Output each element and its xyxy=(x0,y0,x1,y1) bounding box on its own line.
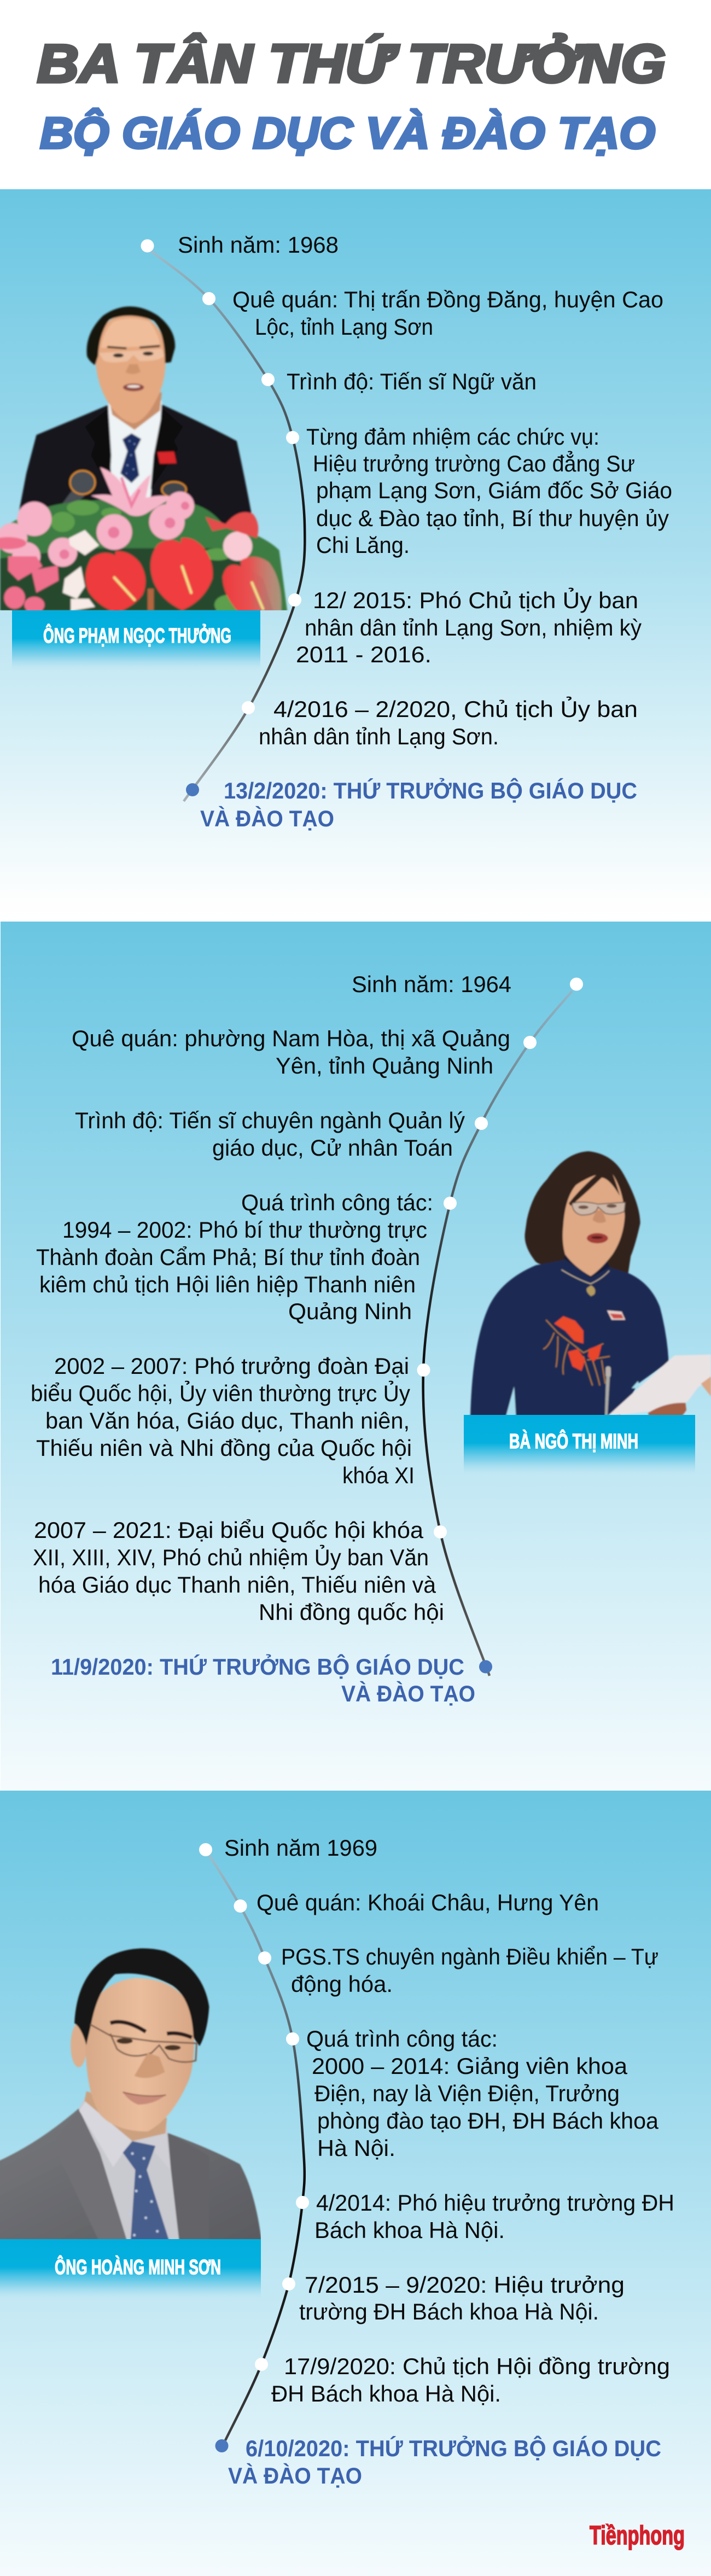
timeline text 1: phạm Lạng Sơn, Giám đốc Sở Giáo xyxy=(316,477,672,503)
timeline text 2: kiêm chủ tịch Hội liên hiệp Thanh niên xyxy=(39,1272,416,1297)
name label: Ông Phạm Ngọc Thưởng: ÔNG PHẠM NGỌC THƯỞNG xyxy=(43,623,231,648)
name label: Bà Ngô Thị Minh: BÀ NGÔ THỊ MINH xyxy=(509,1429,638,1453)
name label: Ông Hoàng Minh Sơn xyxy=(0,2239,261,2301)
timeline text 3: 7/2015 – 9/2020: Hiệu trưởng xyxy=(305,2272,625,2298)
timeline text 2: Sinh năm: 1964 xyxy=(352,971,511,997)
timeline text 1: Chi Lăng. xyxy=(316,532,410,558)
timeline text 2: 1994 – 2002: Phó bí thư thường trực xyxy=(62,1217,427,1243)
highlight: 13/2/2020 xyxy=(200,777,637,831)
timeline text 1: dục & Đào tạo tỉnh, Bí thư huyện ủy xyxy=(316,505,669,531)
timeline text 2 xyxy=(31,971,511,1625)
highlight: 6/10/2020: VÀ ĐÀO TẠO xyxy=(228,2463,362,2488)
timeline text 3: trường ĐH Bách khoa Hà Nội. xyxy=(299,2299,599,2324)
timeline text 2: Quá trình công tác: xyxy=(241,1190,433,1215)
panel: Ngô Thị Minh xyxy=(1,922,711,1791)
highlight: 13/2/2020: 13/2/2020: THỨ TRƯỞNG BỘ GIÁO DỤC xyxy=(224,777,637,803)
timeline text 2: khóa XI xyxy=(342,1462,415,1488)
timeline text 3: động hóa. xyxy=(291,1971,393,1997)
title xyxy=(37,33,666,158)
name label: Bà Ngô Thị Minh xyxy=(464,1415,695,1477)
timeline text 3: Quá trình công tác: xyxy=(306,2026,498,2052)
highlight: 11/9/2020: VÀ ĐÀO TẠO xyxy=(341,1681,475,1706)
portrait: Ngô Thị Minh xyxy=(470,1151,711,1417)
highlight: 6/10/2020 xyxy=(228,2435,661,2488)
portrait: Phạm Ngọc Thưởng xyxy=(0,306,287,615)
timeline text 1 xyxy=(178,232,672,749)
timeline text 1: Từng đảm nhiệm các chức vụ: xyxy=(306,424,599,450)
timeline text 2: Yên, tỉnh Quảng Ninh xyxy=(276,1053,493,1079)
timeline dots 1 xyxy=(141,240,301,796)
timeline dots 2 xyxy=(417,978,583,1674)
name label: Ông Hoàng Minh Sơn: ÔNG HOÀNG MINH SƠN xyxy=(55,2254,221,2279)
timeline text 2: ban Văn hóa, Giáo dục, Thanh niên, xyxy=(45,1408,410,1433)
panel background 1 xyxy=(0,189,711,922)
timeline text 1: Lộc, tỉnh Lạng Sơn xyxy=(255,314,433,340)
timeline text 1: nhân dân tỉnh Lạng Sơn. xyxy=(259,724,499,749)
highlight: 6/10/2020: 6/10/2020: THỨ TRƯỞNG BỘ GIÁO DỤC xyxy=(246,2435,661,2461)
timeline curve 2 xyxy=(423,991,572,1676)
title: BỘ GIÁO DỤC VÀ ĐÀO TẠO xyxy=(40,108,655,158)
highlight: 11/9/2020: 11/9/2020: THỨ TRƯỞNG BỘ GIÁO DỤC xyxy=(51,1653,464,1680)
timeline text 3: Hà Nội. xyxy=(317,2135,395,2161)
title: BA TÂN THỨ TRƯỞNG xyxy=(37,33,666,94)
timeline curve 1 xyxy=(150,250,305,801)
timeline text 1: Hiệu trưởng trường Cao đẳng Sư xyxy=(313,450,635,476)
timeline dots 3 xyxy=(199,1843,309,2452)
timeline text 2: 2007 – 2021: Đại biểu Quốc hội khóa xyxy=(34,1517,424,1543)
timeline text 3: Quê quán: Khoái Châu, Hưng Yên xyxy=(257,1890,599,1915)
timeline text 1: 12/ 2015: Phó Chủ tịch Ủy ban xyxy=(313,587,638,613)
timeline text 1: nhân dân tỉnh Lạng Sơn, nhiệm kỳ xyxy=(305,615,642,640)
timeline text 1: 4/2016 – 2/2020, Chủ tịch Ủy ban xyxy=(273,696,638,722)
timeline text 2: Nhi đồng quốc hội xyxy=(259,1599,444,1625)
panel background 3 xyxy=(0,1791,711,2576)
panel: Phạm Ngọc Thưởng xyxy=(0,189,711,922)
timeline text 2: Quê quán: phường Nam Hòa, thị xã Quảng xyxy=(72,1025,510,1051)
panel background 2 xyxy=(1,922,711,1791)
timeline text 2: biểu Quốc hội, Ủy viên thường trực Ủy xyxy=(31,1380,410,1406)
highlight: 13/2/2020: VÀ ĐÀO TẠO xyxy=(200,806,334,831)
highlight: 11/9/2020 xyxy=(51,1653,475,1706)
timeline text 2: Thiếu niên và Nhi đồng của Quốc hội xyxy=(36,1435,412,1461)
name label: Ông Phạm Ngọc Thưởng xyxy=(12,610,260,673)
timeline text 3: 17/9/2020: Chủ tịch Hội đồng trường xyxy=(284,2353,670,2379)
timeline text 2: XII, XIII, XIV, Phó chủ nhiệm Ủy ban Văn xyxy=(33,1544,429,1570)
timeline text 2: 2002 – 2007: Phó trưởng đoàn Đại xyxy=(54,1353,409,1379)
timeline text 1: Trình độ: Tiến sĩ Ngữ văn xyxy=(287,369,537,394)
header background xyxy=(0,0,711,189)
timeline text 1: 2011 - 2016. xyxy=(296,642,432,667)
timeline curve 3 xyxy=(206,1850,305,2440)
timeline text 3: Sinh năm 1969 xyxy=(224,1835,377,1861)
panel: Hoàng Minh Sơn xyxy=(0,1791,711,2576)
portrait: Hoàng Minh Sơn xyxy=(0,1948,262,2243)
timeline text 3 xyxy=(224,1835,674,2406)
timeline text 2: Trình độ: Tiến sĩ chuyên ngành Quản lý xyxy=(75,1108,465,1133)
timeline text 3: Điện, nay là Viện Điện, Trưởng xyxy=(314,2080,620,2106)
timeline text 2: Thành đoàn Cẩm Phả; Bí thư tỉnh đoàn xyxy=(36,1244,420,1270)
timeline text 2: giáo dục, Cử nhân Toán xyxy=(212,1135,453,1161)
timeline text 2: hóa Giáo dục Thanh niên, Thiếu niên và xyxy=(38,1572,436,1598)
timeline text 1: Sinh năm: 1968 xyxy=(178,232,339,258)
timeline text 2: Quảng Ninh xyxy=(288,1298,412,1324)
timeline text 3: 2000 – 2014: Giảng viên khoa xyxy=(312,2053,628,2079)
timeline text 3: Bách khoa Hà Nội. xyxy=(314,2217,505,2243)
timeline text 3: ĐH Bách khoa Hà Nội. xyxy=(271,2381,501,2406)
timeline text 3: phòng đào tạo ĐH, ĐH Bách khoa xyxy=(317,2108,659,2134)
timeline text 3: PGS.TS chuyên ngành Điều khiển – Tự xyxy=(281,1944,658,1969)
timeline text 3: 4/2014: Phó hiệu trưởng trường ĐH xyxy=(316,2190,674,2216)
timeline text 1: Quê quán: Thị trấn Đồng Đăng, huyện Cao xyxy=(232,287,663,312)
